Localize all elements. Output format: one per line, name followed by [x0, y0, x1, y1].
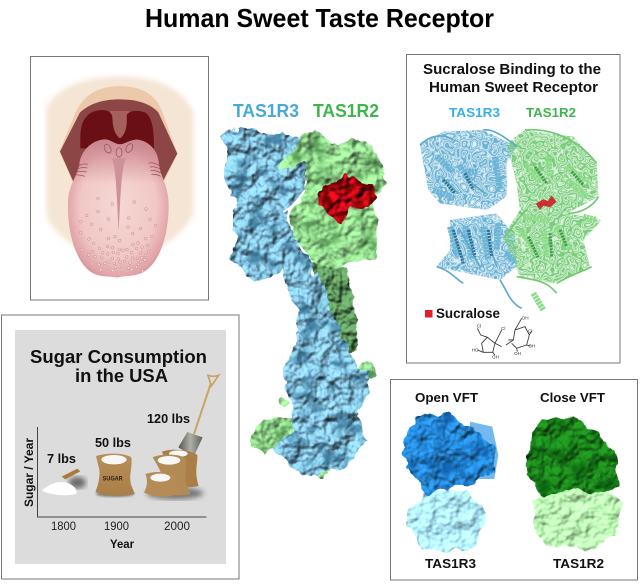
sucralose chemical structure [472, 315, 535, 359]
sucralose chemical structure: HO [472, 348, 479, 353]
TAS1R2 label: TAS1R2 [553, 556, 604, 571]
TAS1R2 density [278, 132, 385, 268]
2000 three sugar sacks [144, 450, 203, 499]
dark green upper lobe [526, 417, 617, 497]
bound sucralose [537, 197, 556, 209]
1800 sugar pile with scoop [42, 469, 86, 495]
1900 tick label: 1900 [104, 521, 129, 533]
x axis labels: 1800 [51, 521, 76, 533]
throat [80, 110, 154, 148]
circumvallate papillae [73, 142, 161, 176]
cryo-EM density map of the receptor [220, 127, 385, 477]
uvula and palate [110, 111, 129, 142]
sucralose chemical structure: OH [492, 354, 499, 359]
TAS1R3 density [220, 127, 368, 477]
y axis label: Sugar / Year [22, 438, 36, 507]
TAS1R3 open VFT surface [403, 414, 498, 552]
central receptor heading: TAS1R2: TAS1R2 [313, 100, 379, 121]
panel heading line 1: Sucralose Binding to the [423, 62, 601, 78]
sugar panel title: Sugar Consumption [30, 347, 207, 367]
ribbon structure [420, 130, 602, 310]
TAS1R2 ribbon loops [503, 130, 602, 283]
2000 tick label: 2000 [164, 521, 190, 533]
lower green fragments [250, 362, 374, 476]
green stem [308, 260, 358, 356]
lips [59, 86, 177, 183]
sucralose chemical structure: Cl [501, 326, 505, 331]
light green lower lobe [533, 487, 624, 551]
TAS1R2 close VFT surface [526, 417, 624, 551]
TAS1R3 ribbon label: TAS1R3 [449, 105, 500, 120]
panel: sugar consumption [2, 315, 239, 579]
light blue lower lobe [408, 490, 486, 552]
sucralose chemical structure: OH [514, 351, 521, 356]
title: Human Sweet Taste Receptor [145, 3, 494, 33]
TAS1R2 helices [503, 130, 598, 310]
sugar panel title line 2: in the USA [75, 366, 168, 386]
tongue shading [72, 139, 163, 183]
TAS1R3 label: TAS1R3 [425, 556, 476, 571]
120 lbs label: 120 lbs [147, 412, 190, 426]
grey background [15, 330, 226, 564]
sucralose chemical structure: Cl [477, 323, 481, 328]
x axis title: Year [110, 537, 134, 551]
1900 sugar sack [95, 454, 135, 497]
50 lbs label: 50 lbs [95, 436, 131, 450]
TAS1R3 ribbon loops [420, 130, 517, 280]
TAS1R2 ribbon label: TAS1R2 [526, 105, 576, 120]
central receptor heading: TAS1R3: TAS1R3 [233, 100, 299, 121]
pale back lobe [470, 422, 498, 479]
ribbon mass underlay [423, 133, 515, 277]
face glow [47, 77, 193, 245]
sucralose density in red [320, 174, 376, 224]
fungiform papillae dots [79, 197, 157, 272]
sucralose chemical structure: Cl [528, 329, 532, 334]
sucralose legend text: Sucralose [436, 305, 500, 321]
dark blue upper lobe [403, 414, 498, 492]
sucralose legend swatch [425, 310, 432, 318]
panel: tongue illustration [30, 56, 208, 300]
mouth cavity [60, 99, 177, 182]
cleft between subunits [283, 190, 305, 212]
panel heading line 2: Human Sweet Receptor [429, 80, 598, 96]
sucralose chemical structure: OH [522, 315, 529, 320]
panel: sucralose binding [406, 54, 620, 363]
TAS1R3 helices [420, 130, 522, 308]
tongue body [68, 139, 169, 278]
7 lbs label: 7 lbs [47, 452, 76, 466]
median groove [112, 157, 126, 232]
Close VFT heading: Close VFT [540, 390, 605, 405]
ribbon mass underlay green [507, 133, 598, 280]
1900 sugar sack: SUGAR [103, 477, 123, 483]
panel: open and close VFT [390, 380, 638, 580]
Open VFT heading: Open VFT [415, 390, 478, 405]
chart axes [38, 427, 206, 517]
sucralose chemical structure: OH [528, 343, 535, 348]
shovel [178, 375, 219, 455]
